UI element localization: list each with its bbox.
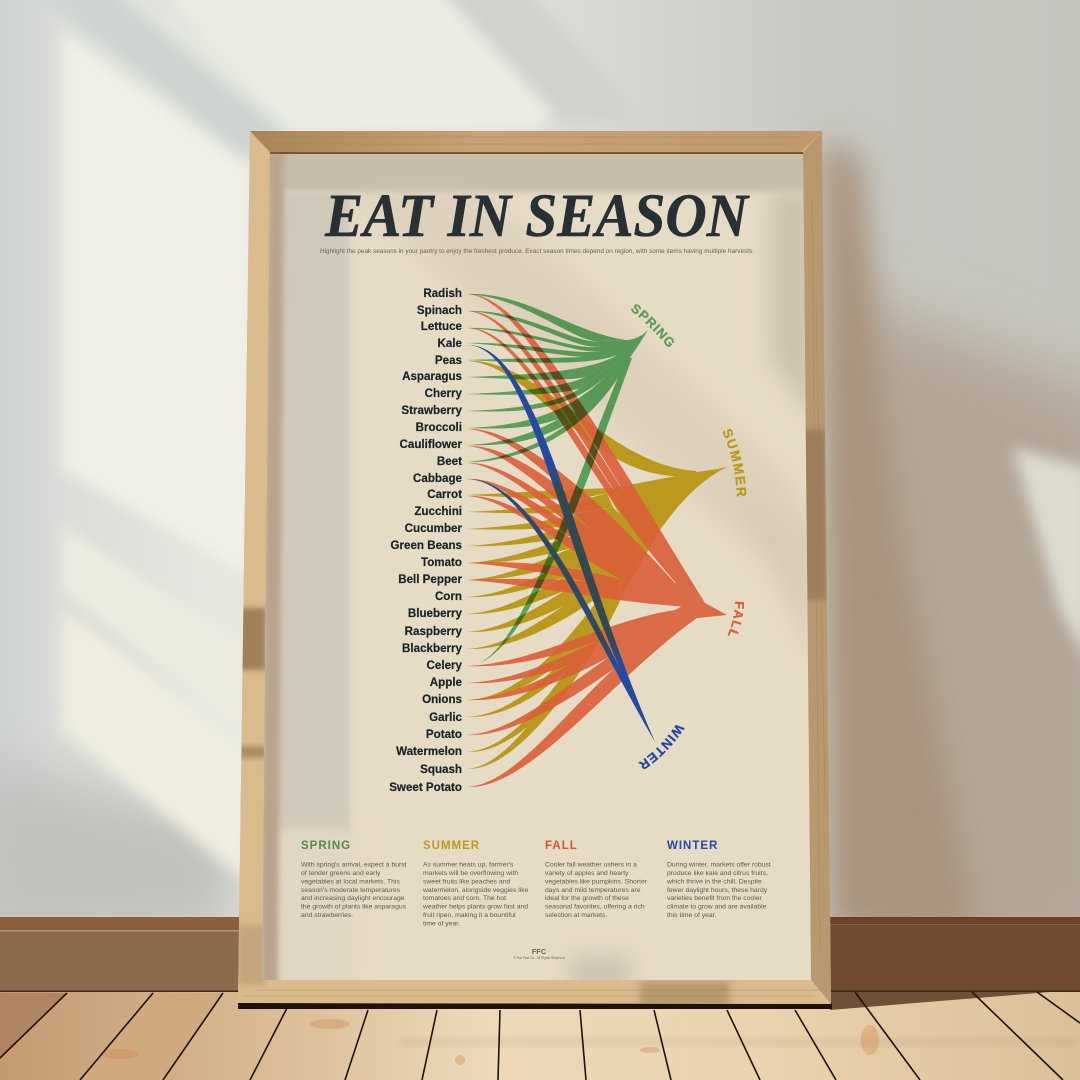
panel: fall description: selection at markets.	[545, 912, 607, 919]
panel: fall description: variety of apples and hearty	[545, 870, 629, 877]
panel: spring description: vegetables at local markets. This	[301, 878, 400, 885]
panel: winter description: which thrive in the chill. Despite	[666, 878, 762, 885]
panel: fall description: Cooler fall weather ushers in a	[545, 862, 637, 868]
wood floor	[0, 992, 1080, 1080]
chart: fall ribbons	[467, 294, 727, 787]
title: EAT IN SEASON	[324, 183, 750, 250]
panel: summer description: As summer heats up, farmer's	[423, 862, 514, 868]
panel: winter description: varieties benefit from the cooler	[667, 895, 763, 902]
panel: fall description: vegetables like pumpkins. Shorter	[545, 878, 648, 885]
panel: winter description: During winter, markets offer robust	[667, 862, 771, 868]
produce labels: Watermelon	[396, 745, 462, 758]
produce labels: Cauliflower	[400, 438, 462, 451]
season label: spring: SPRING	[631, 304, 674, 347]
panel: fall description: seasonal favorites, offering a rich	[545, 904, 645, 911]
panel: winter description: climate to grow and are available	[667, 904, 767, 911]
produce labels: Spinach	[417, 304, 462, 317]
panel: fall description: FALL	[545, 840, 578, 852]
panel: winter description: this time of year.	[667, 912, 717, 919]
panel: fall description: ideal for the growth of these	[545, 895, 629, 902]
panel: fall description	[545, 840, 649, 919]
subtitle: Highlight the peak seasons in your pantry to enjoy the freshest produce. Exact season times depend on region, with some items having multiple harvests.	[320, 248, 754, 255]
panel: summer description: markets will be overflowing with	[423, 870, 518, 877]
panel: winter description: produce like kale and citrus fruits,	[667, 870, 768, 877]
panel: spring description: and increasing daylight encourage	[301, 895, 405, 902]
produce labels: Potato	[426, 728, 462, 741]
baseboard	[0, 917, 1080, 992]
season label: fall: FALL	[728, 602, 744, 636]
panel: spring description: season's moderate temperatures	[301, 887, 401, 894]
chart: winter ribbons	[467, 345, 655, 742]
season label: winter: WINTER	[638, 724, 685, 769]
wooden frame	[238, 131, 831, 1007]
produce labels: Blackberry	[402, 642, 463, 655]
season label: summer: SUMMER	[723, 428, 746, 497]
produce labels: Corn	[435, 590, 462, 603]
produce labels: Raspberry	[405, 625, 463, 638]
produce labels: Cherry	[425, 387, 463, 400]
footer logo and copyright: FFC	[532, 947, 547, 956]
produce labels: Asparagus	[402, 370, 462, 383]
panel: winter description: WINTER	[667, 840, 718, 852]
panel: summer description: SUMMER	[423, 840, 480, 852]
panel: fall description: days and mild temperatures are	[545, 887, 641, 894]
panel: summer description: sweet fruits like peaches and	[423, 878, 510, 885]
produce labels: Onions	[422, 693, 462, 706]
produce labels: Garlic	[429, 711, 463, 724]
panel: spring description	[301, 840, 408, 919]
panel: summer description	[422, 840, 530, 927]
produce labels: Beet	[437, 455, 462, 468]
footer logo and copyright	[513, 947, 565, 960]
chart: spring ribbons	[467, 294, 648, 666]
panel: summer description: weather helps plants grow fast and	[422, 904, 528, 911]
panel: summer description: watermelon, alongside veggies like	[422, 887, 529, 894]
produce labels: Cucumber	[405, 522, 462, 535]
produce labels: Blueberry	[408, 607, 463, 620]
produce labels: Sweet Potato	[389, 781, 462, 794]
panel: summer description: time of year.	[423, 920, 460, 927]
produce labels	[389, 287, 463, 794]
panel: summer description: tomatoes and corn. The hot	[423, 895, 506, 902]
produce labels: Peas	[435, 354, 462, 367]
panel: spring description: the growth of plants like asparagus	[301, 904, 407, 911]
produce labels: Broccoli	[416, 421, 462, 434]
produce labels: Lettuce	[421, 320, 463, 333]
panel: winter description: fewer daylight hours, these hardy	[667, 887, 768, 894]
produce labels: Tomato	[421, 556, 462, 569]
poster	[260, 145, 820, 990]
panel: spring description: of tender greens and early	[301, 870, 381, 877]
panel: winter description	[666, 840, 773, 919]
produce labels: Green Beans	[390, 539, 462, 552]
produce labels: Cabbage	[413, 472, 463, 485]
produce labels: Bell Pepper	[398, 573, 462, 586]
panel: spring description: and strawberries.	[301, 912, 353, 919]
produce labels: Celery	[427, 659, 463, 672]
panel: spring description: SPRING	[301, 840, 351, 852]
produce labels: Kale	[438, 337, 463, 350]
panel: summer description: fruit ripen, making it a bountiful	[423, 912, 516, 919]
produce labels: Carrot	[427, 488, 462, 501]
produce labels: Squash	[420, 763, 462, 776]
produce labels: Radish	[423, 287, 462, 300]
produce labels: Zucchini	[414, 505, 462, 518]
chart: summer ribbons	[467, 361, 727, 769]
panel: spring description: With spring's arrival, expect a burst	[301, 862, 407, 868]
footer logo and copyright: © Fun Fact Co., All Rights Reserved	[513, 956, 565, 960]
produce labels: Strawberry	[401, 404, 463, 417]
produce labels: Apple	[430, 676, 463, 689]
